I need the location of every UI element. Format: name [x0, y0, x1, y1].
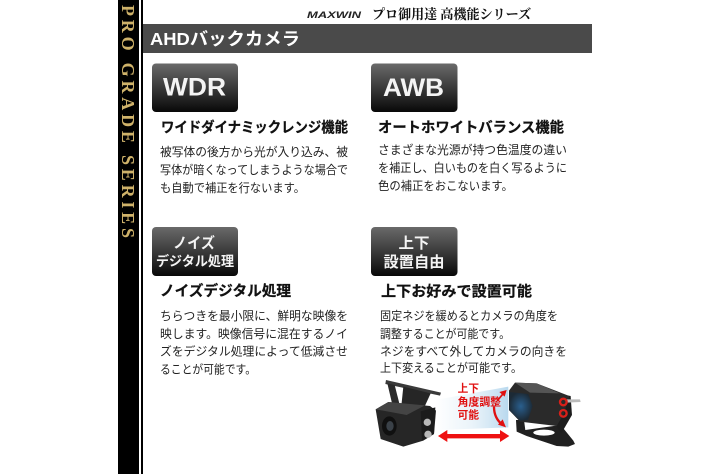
description: mounting	[380, 309, 567, 375]
description: WDR: も自動で補正を行ないます。	[160, 181, 305, 195]
badge: noise: デジタル処理	[156, 253, 234, 269]
description: AWB	[378, 142, 567, 193]
panel: up-down mounting	[371, 227, 567, 375]
badge: noise	[152, 227, 238, 276]
description: WDR: 写体が暗くなってしまうような場合で	[160, 162, 348, 177]
icon: left camera	[376, 380, 441, 447]
description: mounting: 固定ネジを緩めるとカメラの角度を	[380, 309, 558, 323]
description: noise: 映します。映像信号に混在するノイ	[160, 326, 348, 341]
header bar: AHDバックカメラ	[143, 24, 592, 53]
description: AWB: 色の補正をおこないます。	[378, 179, 513, 193]
sidebar: PRO GRADE SERIES: PRO GRADE SERIES	[118, 5, 138, 238]
angle label	[458, 382, 501, 422]
badge: WDR: WDR	[163, 74, 226, 102]
description: AWB: を補正し、白いものを白く写るように	[378, 160, 567, 175]
angle label: 上下	[458, 382, 479, 395]
top title: MAXWIN series line: プロ御用達 高機能シリーズ	[372, 6, 531, 22]
badge: mounting: 上下	[398, 235, 430, 252]
panel: noise digital processing	[152, 227, 348, 376]
heading: WDR: ワイドダイナミックレンジ機能	[161, 118, 348, 136]
panel: AWB	[371, 64, 567, 193]
badge: noise: ノイズ	[173, 234, 215, 252]
description: AWB: さまざまな光源が持つ色温度の違い	[378, 142, 567, 157]
badge: mounting	[371, 227, 458, 276]
top title: MAXWIN series line	[307, 6, 531, 22]
description: noise: ズをデジタル処理によって低減させ	[160, 344, 348, 358]
arrows: angle adjustment	[494, 390, 507, 427]
badge: WDR	[152, 64, 238, 112]
description: WDR	[160, 144, 348, 195]
description: noise: ちらつきを最小限に、鮮明な映像を	[160, 309, 348, 323]
panel: WDR	[152, 64, 348, 195]
description: WDR: 被写体の後方から光が入り込み、被	[160, 144, 348, 159]
top title: MAXWIN series line: MAXWIN	[307, 10, 362, 20]
description: mounting: ネジをすべて外してカメラの向きを	[380, 344, 567, 358]
heading: noise: ノイズデジタル処理	[160, 282, 291, 300]
header bar: AHDバックカメラ: AHDバックカメラ	[150, 29, 300, 49]
angle label: 角度調整	[458, 395, 501, 408]
badge: mounting: 設置自由	[384, 253, 444, 271]
camera illustration	[376, 380, 581, 447]
light beam	[435, 387, 508, 430]
description: mounting: 調整することが可能です。	[380, 326, 510, 341]
badge: AWB: AWB	[383, 74, 444, 102]
badge: AWB	[371, 64, 458, 112]
heading: AWB: オートホワイトバランス機能	[378, 118, 564, 136]
icon: right camera	[509, 383, 581, 447]
description: noise	[160, 309, 348, 376]
arrow: horizontal double	[438, 430, 509, 442]
heading: mounting: 上下お好みで設置可能	[381, 282, 533, 300]
angle label: 可能	[458, 409, 479, 422]
description: noise: ることが可能です。	[160, 362, 256, 376]
sidebar: PRO GRADE SERIES	[118, 0, 143, 474]
description: mounting: 上下変えることが可能です。	[380, 360, 522, 375]
